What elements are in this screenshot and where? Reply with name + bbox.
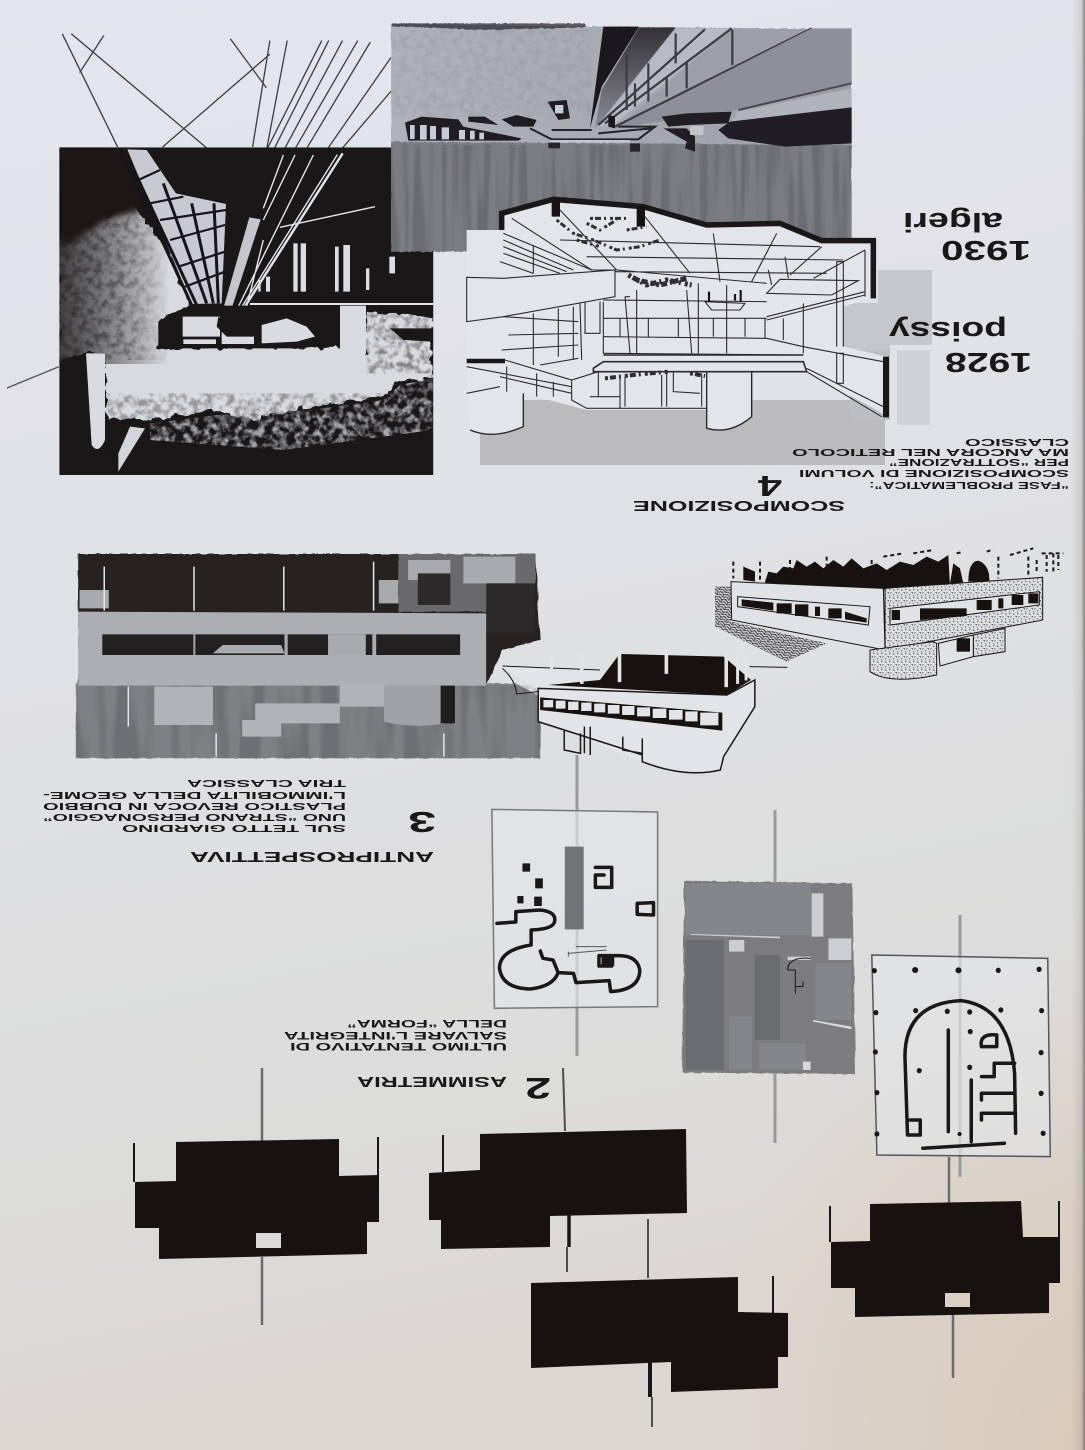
date label: 1928 poissy: [889, 316, 1032, 378]
construction lines above dark photo: [7, 34, 391, 388]
right wall and shelf: [767, 279, 858, 295]
text block: ultimo tentativo: SALVARE L'INTEGRITA: [284, 1029, 507, 1041]
text block: fase problematica: MA ANCORA NEL RETICOLO: [792, 446, 1069, 457]
text block: sul tetto giardino: TRIA CLASSICA: [186, 777, 346, 789]
date label: 1930 algeri: 1930: [941, 235, 1031, 266]
ceiling grid: [512, 210, 865, 283]
text block: ultimo tentativo: [284, 1017, 507, 1052]
footprint B: asymmetric: [429, 1068, 687, 1272]
left rooms: [502, 302, 603, 365]
hatched villa rendering with trees: [715, 548, 1063, 679]
text block: ultimo tentativo: ULTIMO TENTATIVO DI: [290, 1040, 507, 1052]
text block: fase problematica: “FASE PROBLEMATICA”:: [869, 479, 1069, 490]
sketch plan: arched outline with columns: [872, 955, 1050, 1157]
beams converging: [223, 217, 261, 308]
gray wash plan: [682, 881, 855, 1074]
heading: scomposizione: SCOMPOSIZIONE: [633, 497, 845, 514]
shadow on right: [718, 107, 852, 147]
left balcony clumps: [405, 100, 570, 141]
text block: fase problematica: SCOMPOSIZIONE DI VOLUMI: [799, 467, 1069, 478]
text block: sul tetto giardino: [42, 777, 346, 834]
text block: fase problematica: PER “SOTTRAZIONE”: [889, 456, 1069, 467]
heading: asimmetria: ASIMMETRIA: [357, 1073, 507, 1090]
shaded left of sky: [59, 147, 169, 364]
text block: sul tetto giardino: PLASTICO REVOCA IN DUBBIO: [43, 800, 346, 812]
date label: 1928 poissy: poissy: [889, 316, 1007, 346]
villa silhouette: [158, 306, 313, 348]
windows: [258, 243, 395, 292]
number 3: 3: [408, 805, 436, 837]
heading: antiprospettiva: ANTIPROSPETTIVA: [190, 848, 434, 865]
left balcony: [467, 270, 615, 322]
footprint C: asymmetric: [531, 1219, 788, 1427]
text block: sul tetto giardino: SUL TETTO GIARDINO: [122, 822, 346, 834]
guide line: axis of right plan: [958, 915, 962, 1177]
grid of window: [127, 149, 226, 304]
date label: 1930 algeri: [903, 207, 1031, 266]
hanging planter: [705, 302, 745, 310]
plans row: [492, 809, 1050, 1157]
text block: sul tetto giardino: UNO “STRANO PERSONAGGIO”: [43, 811, 346, 823]
photograph of roof garden: [76, 554, 540, 758]
cloud light area: [59, 203, 432, 420]
lower floor: [467, 360, 707, 408]
trees: [743, 555, 989, 590]
sketch plan: curved volumes: [492, 809, 658, 1008]
line drawing of villa with black roof: [502, 650, 787, 773]
text block: ultimo tentativo: DELLA “FORMA”: [347, 1017, 507, 1029]
footprint D: symmetric with opening: [830, 1157, 1060, 1378]
dark photograph: [59, 147, 433, 475]
text block: fase problematica: [792, 436, 1069, 490]
middle wall and columns: [603, 283, 803, 355]
converging band: [590, 27, 639, 128]
light gray backdrop blocks: [480, 270, 932, 465]
text block: sul tetto giardino: L'IMMOBILITA DELLA GEOME-: [42, 789, 346, 801]
shrubs: [715, 587, 827, 662]
text block: fase problematica: CLASSICO: [965, 436, 1069, 447]
panel 4: scomposizione, composite images: [7, 23, 1069, 514]
guide line: axis of gray plan: [774, 810, 776, 1143]
panel 2: asimmetria: [134, 1017, 1060, 1427]
number 2: 2: [525, 1071, 551, 1104]
mottled cloud edge: [150, 378, 433, 450]
gray photograph of ribbon window interior: [391, 23, 852, 252]
columns: [470, 372, 752, 434]
number 4: 4: [758, 469, 782, 501]
footprint A: symmetric with opening: [134, 1068, 379, 1325]
date label: 1928 poissy: 1928: [945, 347, 1032, 378]
roof thick outline: [502, 199, 873, 298]
guide line: axis of plan column left: [576, 755, 578, 1056]
foliage: [557, 218, 660, 250]
cutaway interior line drawing: [467, 197, 888, 434]
date label: 1930 algeri: algeri: [903, 207, 1003, 237]
panel 3: antiprospettiva: [42, 548, 1063, 865]
